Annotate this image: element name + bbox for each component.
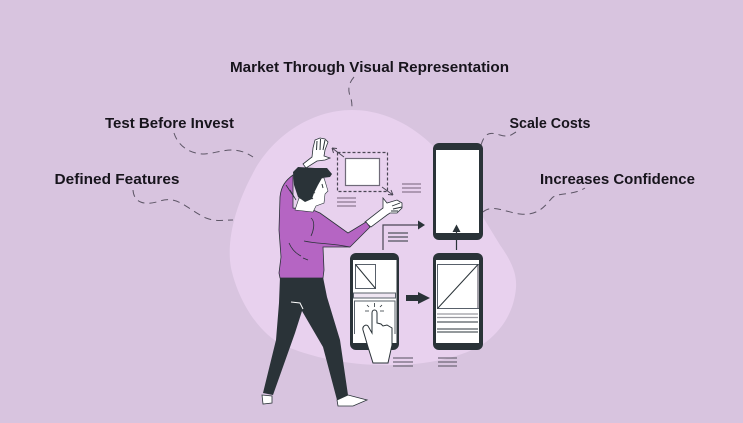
icon: tapping hand [363,303,392,363]
raised forearm and hand [303,138,330,168]
text-line icons below phones [393,358,457,366]
finger lines on reaching hand [391,203,402,211]
trousers [263,277,348,400]
dashed connectors [133,77,585,220]
label: Defined Features: Defined Features [54,172,180,188]
finger lines on raised hand [316,139,325,150]
arrow: between phones [406,292,430,304]
phone: top right [433,143,483,250]
reaching forearm and hand [365,198,402,227]
label: Test Before Invest: Test Before Invest [105,116,234,132]
label: Market Through Visual Representation: Market Through Visual Representation [230,60,509,76]
label: Increases Confidence: Increases Confidence [540,172,695,188]
eye and ear detail [312,184,323,199]
clothing folds [286,185,350,260]
background blob [230,110,516,365]
phone: bottom left [350,253,399,350]
face and neck [295,178,328,212]
elbow arrow [383,220,425,250]
wireframe card with dashed selection [332,148,393,195]
person [262,138,402,406]
sweater [279,175,370,278]
shoes [262,395,367,406]
hair [293,167,332,202]
text-line icon near card [337,184,421,206]
label: Scale Costs: Scale Costs [510,116,590,132]
phone: bottom right [433,253,483,350]
